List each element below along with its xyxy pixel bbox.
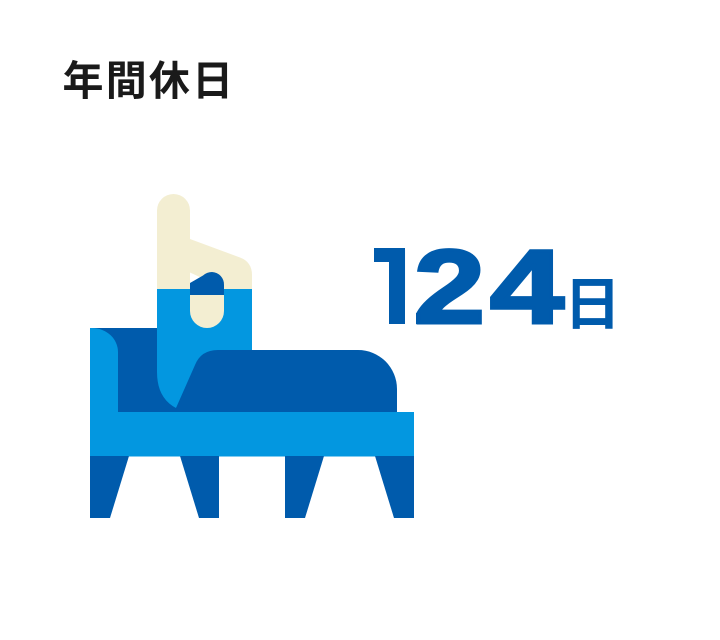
unit: day: 日 <box>564 273 621 337</box>
sofa seat <box>90 412 414 456</box>
body: light blue <box>157 289 252 408</box>
digit 4: 4 <box>490 229 564 346</box>
sofa back <box>90 328 180 412</box>
sofa legs <box>90 456 414 518</box>
sofa arm left <box>90 328 118 412</box>
sofa cushion <box>174 350 397 412</box>
digit 1: 1 <box>365 226 425 347</box>
head: dark blue <box>190 272 224 295</box>
hand: cream <box>190 295 224 328</box>
digit 2: 2 <box>414 228 485 345</box>
title: 年間休日 <box>62 58 235 104</box>
gap between arm and head <box>190 272 204 286</box>
raised leg: cream upper <box>157 194 190 289</box>
raised arm: cream <box>190 239 252 289</box>
number: 124 days <box>365 226 621 347</box>
digit 1 stem and flag <box>374 248 405 324</box>
digit 1 base and flag trim <box>365 240 416 330</box>
icon: person resting on sofa <box>90 194 414 518</box>
